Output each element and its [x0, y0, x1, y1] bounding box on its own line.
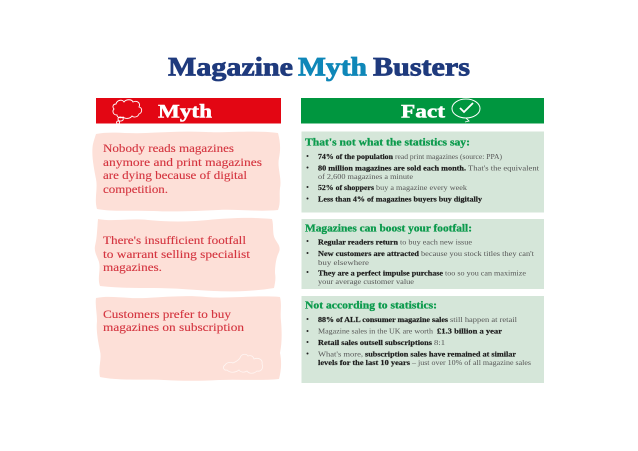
fact 2 heading: Magazines can boost your footfall:: [305, 222, 472, 234]
fact 1 bullets: 74% of the population: [318, 152, 394, 161]
fact 1 heading: That's not what the statistics say:: [305, 136, 470, 148]
fact 3 bullets: Magazine sales in the UK are worth: [318, 326, 433, 336]
myth 1 text: are dying because of digital: [103, 168, 248, 182]
heading: Fact: Fact: [401, 102, 446, 122]
fact 3 bullets: subscription sales have remained at similar: [365, 350, 517, 358]
fact 1 bullets: 52% of shoppers: [318, 183, 374, 192]
fact 1 bullets: [306, 152, 540, 204]
icon: check bubble: [452, 99, 480, 122]
myth 3 text: [103, 307, 244, 334]
fact 2 bullets: too so you can maximize: [445, 268, 527, 278]
fact 3 bullets: 8:1: [434, 338, 445, 347]
fact 1 bullets: buy a magazine every week: [376, 183, 467, 192]
fact 3 heading: Not according to statistics:: [305, 300, 437, 312]
fact 3 bullets: still happen at retail: [450, 315, 518, 324]
fact 2 bullets: Regular readers return: [318, 238, 399, 246]
fact 2 bullets: your average customer value: [318, 277, 415, 286]
myth 1 text: Nobody reads magazines: [103, 141, 234, 155]
panel: myth header: [96, 98, 281, 124]
myth 2 text: magazines.: [103, 260, 162, 274]
fact 2 bullets: buy elsewhere: [318, 258, 370, 267]
title: Myth: [298, 52, 368, 82]
myth 3 text: magazines on subscription: [103, 320, 244, 334]
myth 1 text: anymore and print magazines: [103, 155, 262, 169]
myth 2 text: There's insufficient footfall: [103, 233, 247, 247]
fact 3 bullets: 88% of ALL consumer magazine sales: [318, 315, 448, 324]
fact 3 bullets: £1.3 billion a year: [437, 326, 503, 336]
fact 2 bullets: [306, 238, 535, 286]
title: [168, 52, 470, 82]
fact 1 bullets: read print magazines (source: PPA): [395, 152, 502, 161]
fact 1 bullets: Less than 4% of magazines buyers buy digitally: [318, 194, 482, 204]
panel: myth 1: [92, 132, 280, 211]
fact 3 bullets: Retail sales outsell subscriptions: [318, 338, 432, 347]
title: Busters: [373, 52, 470, 82]
panel: myth 3: [96, 296, 282, 381]
panel: fact 3: [302, 296, 544, 383]
panel: fact 1: [302, 132, 544, 212]
title: Magazine: [168, 52, 293, 82]
myth 3 text: Customers prefer to buy: [103, 307, 231, 321]
fact 3 bullets: What's more,: [318, 350, 363, 358]
fact 3 bullets: levels for the last 10 years: [318, 358, 410, 367]
panel: myth 2: [95, 218, 280, 291]
myth 1 text: [103, 141, 262, 196]
heading: Myth: Myth: [158, 102, 213, 122]
fact 2 bullets: They are a perfect impulse purchase: [318, 268, 444, 278]
fact 3 bullets: – just over 10% of all magazine sales: [411, 358, 531, 367]
icon: faint cloud: [224, 354, 263, 373]
myth 2 text: [103, 233, 251, 274]
myth 1 text: competition.: [103, 182, 168, 196]
panel: fact header: [301, 98, 544, 124]
fact 3 bullets: [306, 315, 531, 367]
fact 2 bullets: to buy each new issue: [400, 238, 473, 246]
fact 1 bullets: That's the equivalent: [468, 164, 540, 172]
fact 2 bullets: because you stock titles they can't: [421, 249, 535, 258]
fact 1 bullets: 80 million magazines are sold each month.: [318, 164, 466, 172]
fact 2 bullets: New customers are attracted: [318, 249, 420, 258]
fact 1 bullets: of 2,600 magazines a minute: [318, 172, 414, 181]
panel: fact 2: [302, 219, 544, 289]
myth 2 text: to warrant selling specialist: [103, 247, 251, 261]
icon: thought cloud: [113, 100, 142, 124]
